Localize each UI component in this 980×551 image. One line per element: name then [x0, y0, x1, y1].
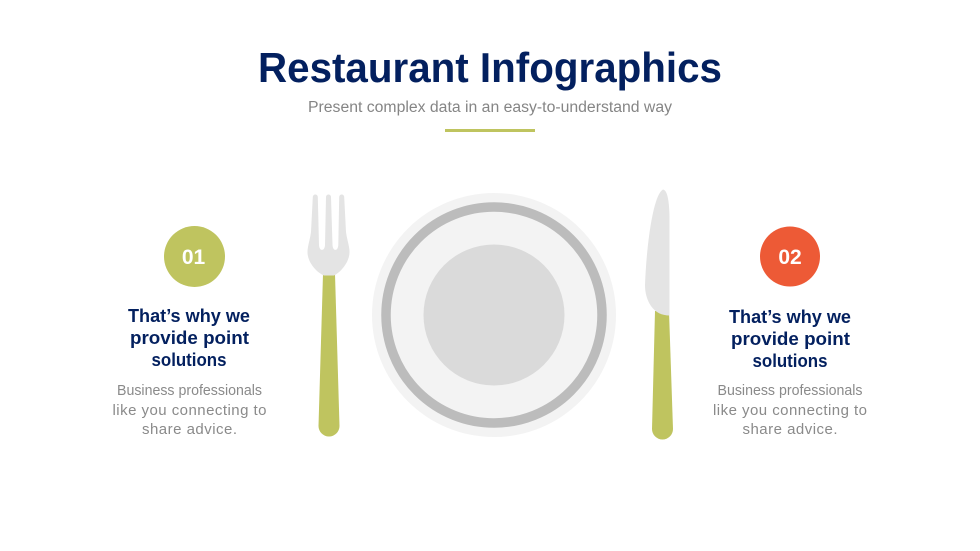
heading right: provide point — [731, 328, 850, 349]
body text right: Business professionals — [718, 382, 862, 399]
body text left: like you connecting to — [112, 402, 266, 419]
badge 02 — [760, 226, 820, 286]
heading left: That’s why we — [128, 305, 250, 326]
right column — [713, 226, 867, 438]
heading left: solutions — [152, 349, 226, 370]
heading left: provide point — [130, 327, 249, 348]
body text left: Business professionals — [117, 382, 262, 399]
icon: knife — [645, 190, 673, 440]
title underline — [445, 129, 535, 132]
heading right: solutions — [752, 350, 828, 371]
body text left: share advice. — [142, 421, 237, 438]
icon: fork — [308, 194, 350, 436]
badge 01 — [164, 226, 225, 287]
heading left — [128, 305, 250, 370]
left column — [112, 226, 266, 438]
badge 02: 02 — [778, 246, 802, 269]
body text left — [112, 382, 266, 438]
icon: plate — [372, 193, 616, 437]
body text right — [713, 382, 867, 438]
body text right: share advice. — [742, 421, 838, 438]
badge 01: 01 — [182, 246, 205, 269]
title: Restaurant Infographics — [258, 44, 722, 91]
heading right: That’s why we — [729, 306, 851, 327]
heading right — [729, 306, 851, 371]
body text right: like you connecting to — [713, 402, 867, 419]
subtitle: Present complex data in an easy-to-understand way — [308, 99, 672, 116]
